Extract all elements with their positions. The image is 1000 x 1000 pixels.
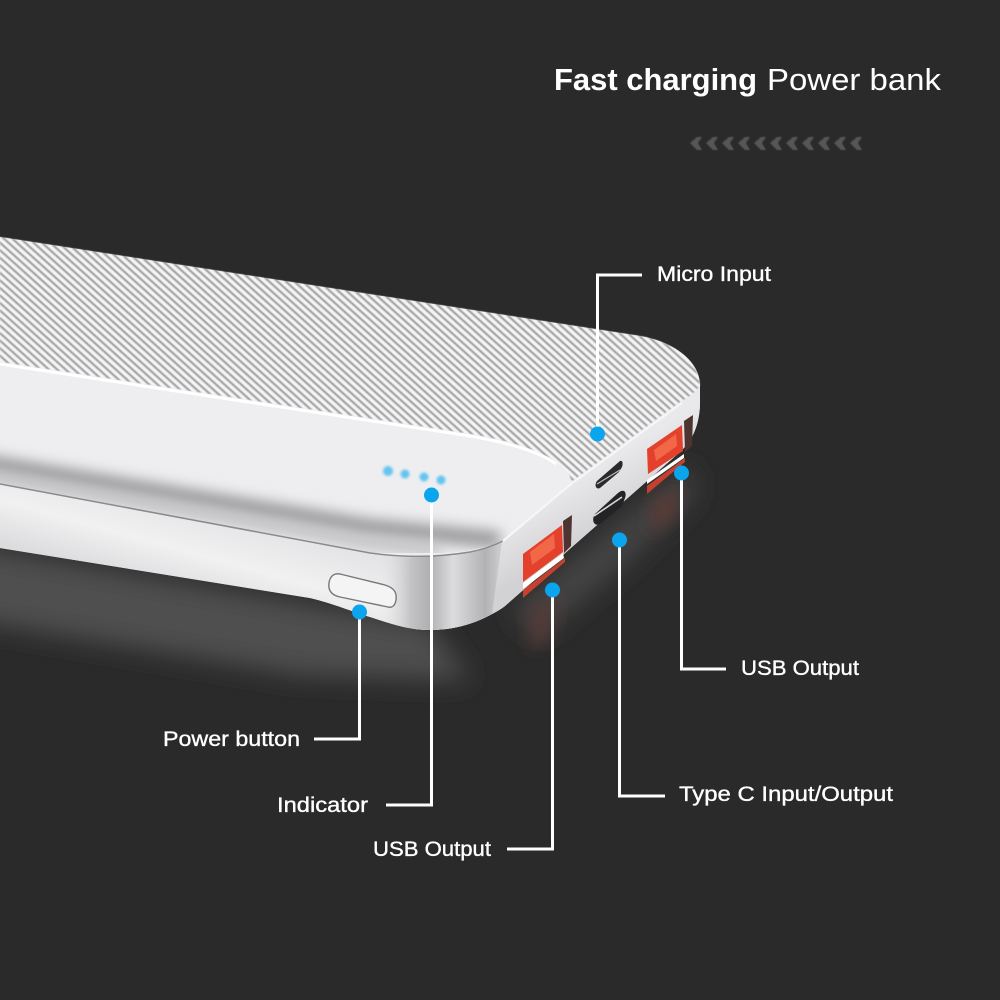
title — [554, 62, 942, 97]
end face top edge — [503, 403, 682, 541]
metal sheen at the corner — [375, 541, 505, 630]
power bank — [0, 237, 700, 630]
title: Fast charging — [554, 62, 757, 97]
LED indicator lights — [383, 466, 446, 484]
icon: chevron row — [690, 137, 862, 150]
lower side band — [0, 485, 505, 630]
body silhouette — [0, 237, 700, 630]
callout lines — [314, 275, 726, 849]
micro port — [596, 461, 623, 488]
label: Type C Input/Output: Type C Input/Output — [679, 783, 893, 806]
label: USB Output left: USB Output — [373, 838, 491, 861]
label: Micro Input: Micro Input — [657, 263, 771, 286]
reflection under power bank — [0, 465, 695, 680]
end face with ports — [492, 386, 700, 614]
groove line — [0, 484, 503, 556]
label: Indicator: Indicator — [277, 794, 368, 817]
label: Power button: Power button — [163, 728, 300, 751]
right USB port — [647, 415, 693, 494]
front panel and shading — [0, 363, 571, 553]
front panel highlight edge — [0, 364, 556, 464]
type-c port — [593, 491, 626, 525]
left USB port — [523, 515, 572, 598]
callout dots — [352, 426, 689, 620]
power button — [329, 574, 396, 607]
title: Power bank — [767, 62, 942, 97]
label: USB Output right: USB Output — [741, 657, 859, 680]
top face with diagonal texture — [0, 237, 700, 482]
